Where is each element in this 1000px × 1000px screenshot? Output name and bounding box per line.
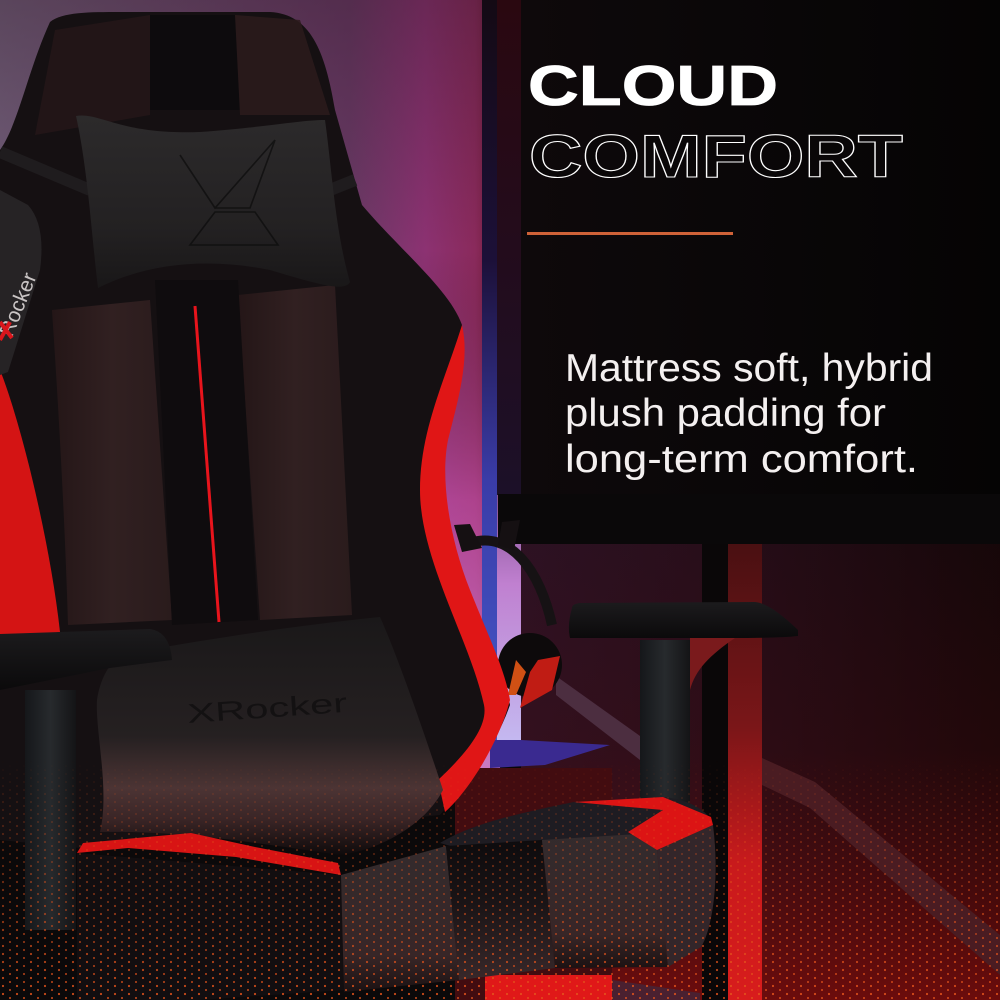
seat cushion [77,797,716,1000]
body text [565,347,933,481]
headset on hook [454,520,562,708]
headrest strap [0,152,355,192]
right armrest [569,602,798,810]
red centre stitch [195,306,219,622]
lumbar pillow [97,617,443,855]
body text: Mattress soft, hybrid [565,347,933,390]
side logo panel [0,190,42,375]
chair backrest [0,12,510,1000]
lumbar pillow: XRocker [186,688,348,729]
headrest pillow [76,116,350,288]
left armrest [0,629,172,930]
body text: plush padding for [565,392,886,435]
floor glow and desk [455,494,1000,1000]
title: CLOUD [528,54,778,118]
body text: long-term comfort. [565,438,918,481]
halftone dot overlay [0,760,1000,1000]
orange divider [527,232,733,235]
side logo X [0,322,12,340]
red seat panel right [574,797,713,850]
title: COMFORT [529,123,903,190]
red seat trim left [77,833,341,875]
title [528,54,903,190]
